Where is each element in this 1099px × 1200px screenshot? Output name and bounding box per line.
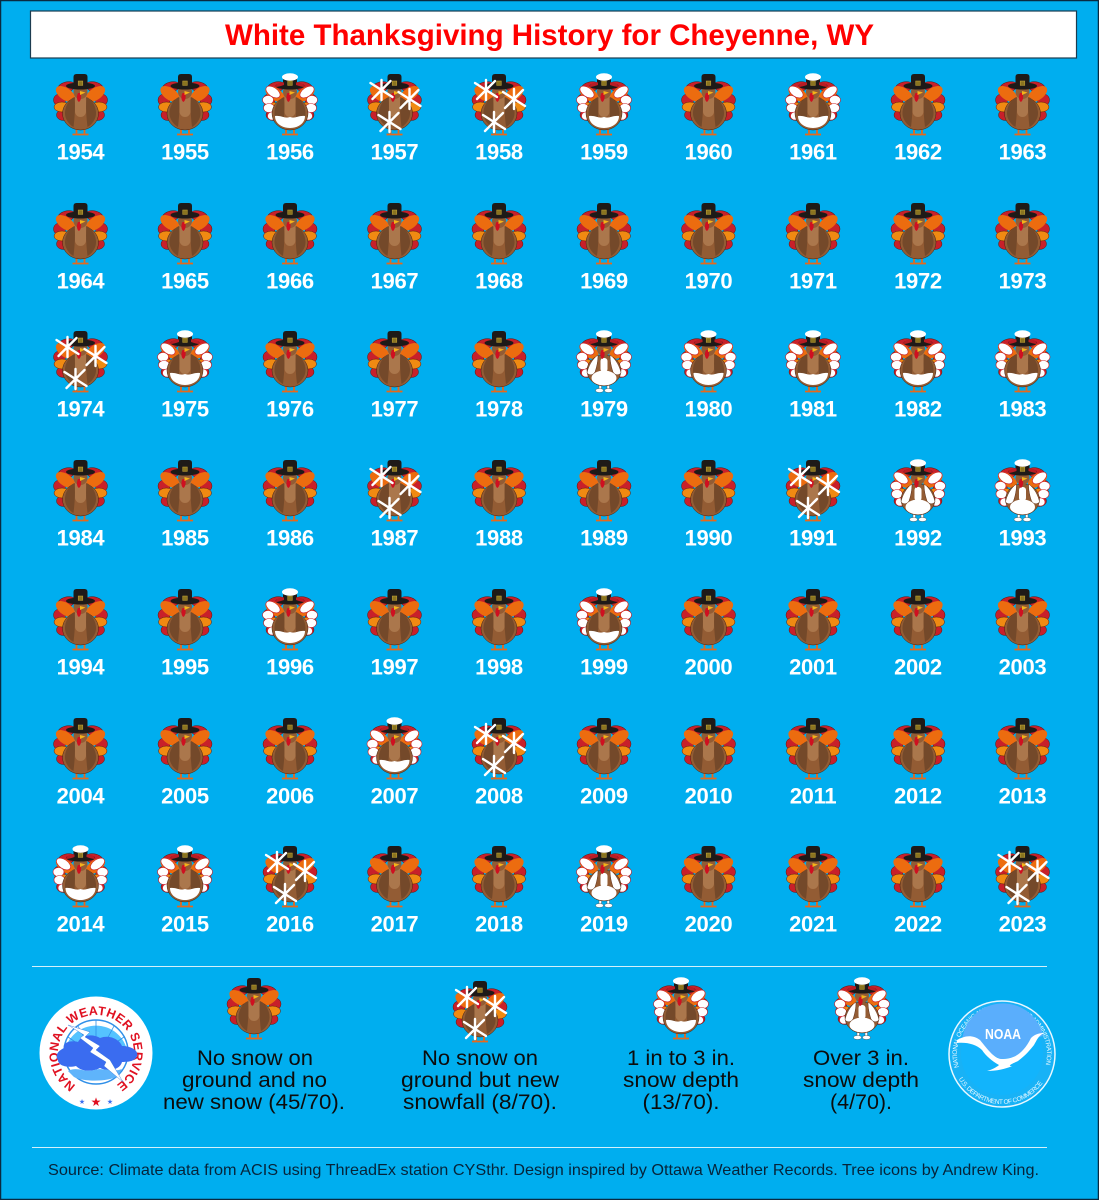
1984 no snow: 1984 [57,526,105,550]
1955 no snow [158,74,212,164]
2015 snow depth 1-3 in [158,845,212,936]
1957 new snowfall [367,74,422,164]
2018 no snow: 2018 [475,912,523,936]
1985 no snow [158,460,212,550]
1971 no snow: 1971 [789,268,837,294]
1958 new snowfall [472,74,526,164]
1999 snow depth 1-3 in: 1999 [580,654,628,680]
1962 no snow: 1962 [894,140,942,164]
logo: NOAA: U.S. DEPARTMENT OF COMMERCE [959,1076,1042,1104]
1983 snow depth 1-3 in [995,330,1050,422]
1975 snow depth 1-3 in: 1975 [161,396,209,422]
1963 no snow: 1963 [999,140,1046,164]
1960 no snow: 1960 [685,140,732,164]
logo: NOAA: NOAA [985,1026,1021,1043]
1958 new snowfall: 1958 [475,140,523,164]
2017 no snow: 2017 [371,912,418,936]
2011 no snow: 2011 [790,784,836,808]
1990 no snow: 1990 [685,526,732,550]
1967 no snow [367,203,422,294]
1973 no snow: 1973 [999,268,1046,294]
2002 no snow: 2002 [894,654,942,680]
2004 no snow [53,718,108,808]
1975 snow depth 1-3 in [158,330,212,422]
1986 no snow [263,460,317,550]
2020 no snow: 2020 [685,912,732,936]
1960 no snow [681,74,736,164]
1959 snow depth 1-3 in: 1959 [580,140,628,164]
2008 new snowfall [472,718,526,808]
1982 snow depth 1-3 in [890,330,946,422]
1993 snow depth over 3 in: 1993 [999,526,1046,550]
1988 no snow: 1988 [475,526,523,550]
2023 new snowfall [995,846,1050,936]
2013 no snow [995,718,1050,808]
2021 no snow: 2021 [789,912,837,936]
1995 no snow: 1995 [161,654,209,680]
1980 snow depth 1-3 in: 1980 [685,396,732,422]
1974 new snowfall: 1974 [57,396,105,422]
1987 new snowfall [367,460,422,550]
legend: no snow: ground and no [182,1069,327,1092]
2008 new snowfall: 2008 [475,784,523,808]
1997 no snow [367,589,422,680]
1995 no snow [158,589,212,680]
logo: National Weather Service: ★ [79,1098,85,1106]
legend: new snowfall: No snow on [422,1047,538,1070]
1984 no snow [53,460,108,550]
1972 no snow: 1972 [894,268,942,294]
source note: Source: Climate data from ACIS using ThreadEx station CYSthr. Design inspired by Ottawa Weather Records. Tree icons by Andrew King. [48,1162,1039,1179]
1978 no snow [472,331,526,422]
legend: over 3 in depth: (4/70). [830,1091,892,1114]
logo: National Weather Service: ★ [107,1098,113,1106]
1968 no snow [472,203,526,294]
1991 new snowfall: 1991 [789,526,837,550]
2005 no snow [158,718,212,808]
1992 snow depth over 3 in [890,459,946,550]
1979 snow depth over 3 in: 1979 [580,396,628,422]
2019 snow depth over 3 in [576,845,632,936]
2011 no snow [786,718,840,808]
1993 snow depth over 3 in [995,459,1050,550]
1964 no snow: 1964 [57,268,105,294]
2023 new snowfall: 2023 [999,912,1046,936]
legend: 1 to 3 in depth: snow depth [623,1069,739,1092]
1973 no snow [995,203,1050,294]
1969 no snow: 1969 [580,268,628,294]
1983 snow depth 1-3 in: 1983 [999,396,1046,422]
1954 no snow: 1954 [57,140,105,164]
2005 no snow: 2005 [161,784,209,808]
2018 no snow [472,846,526,936]
2020 no snow [681,846,736,936]
1981 snow depth 1-3 in: 1981 [789,396,837,422]
2022 no snow: 2022 [894,912,942,936]
1987 new snowfall: 1987 [371,526,418,550]
2007 snow depth 1-3 in [367,717,422,808]
1980 snow depth 1-3 in [681,330,736,422]
1979 snow depth over 3 in [576,330,632,422]
1988 no snow [472,460,526,550]
logo: NOAA [948,1000,1056,1108]
legend: over 3 in depth [803,977,919,1114]
1994 no snow: 1994 [57,654,105,680]
2022 no snow [891,846,945,936]
1990 no snow [681,460,736,550]
2016 new snowfall: 2016 [266,912,314,936]
1999 snow depth 1-3 in [576,588,632,680]
2001 no snow: 2001 [789,654,837,680]
1977 no snow: 1977 [371,396,418,422]
2016 new snowfall [263,846,317,936]
2007 snow depth 1-3 in: 2007 [371,784,418,808]
2000 no snow [681,589,736,680]
1956 snow depth 1-3 in [262,73,318,164]
legend: no snow: No snow on [197,1047,313,1070]
1966 no snow [263,203,317,294]
logo: National Weather Service [40,996,152,1110]
legend: no snow [163,978,345,1114]
2014 snow depth 1-3 in [53,845,108,936]
legend: 1 to 3 in depth: (13/70). [642,1091,720,1114]
legend: new snowfall: ground but new [401,1069,560,1092]
legend: 1 to 3 in depth [623,977,739,1114]
1967 no snow: 1967 [371,268,418,294]
legend: new snowfall [401,981,560,1114]
1956 snow depth 1-3 in: 1956 [266,140,314,164]
legend: 1 to 3 in depth: 1 in to 3 in. [627,1047,735,1070]
1974 new snowfall [53,331,108,422]
1996 snow depth 1-3 in: 1996 [266,654,314,680]
1954 no snow [53,74,108,164]
legend: over 3 in depth: snow depth [803,1069,919,1092]
2002 no snow [891,589,945,680]
1985 no snow: 1985 [161,526,209,550]
1972 no snow [891,203,945,294]
2012 no snow: 2012 [894,784,942,808]
2010 no snow [681,718,736,808]
2010 no snow: 2010 [685,784,732,808]
1961 snow depth 1-3 in: 1961 [789,140,837,164]
2004 no snow: 2004 [57,784,105,808]
2019 snow depth over 3 in: 2019 [580,912,628,936]
2009 no snow: 2009 [580,784,628,808]
2001 no snow [786,589,840,680]
1976 no snow [263,331,317,422]
1991 new snowfall [786,460,840,550]
legend: over 3 in depth: Over 3 in. [813,1047,909,1070]
logo: NOAA: NATIONAL OCEANIC AND ATMOSPHERIC ADMINISTRATION [952,1007,1052,1068]
turkey year grid [53,73,1050,936]
1957 new snowfall: 1957 [371,140,418,164]
2015 snow depth 1-3 in: 2015 [161,912,209,936]
1963 no snow [995,74,1050,164]
1969 no snow [577,203,631,294]
1971 no snow [786,203,840,294]
2003 no snow [995,589,1050,680]
2021 no snow [786,846,840,936]
1994 no snow [53,589,108,680]
2000 no snow: 2000 [685,654,732,680]
2006 no snow: 2006 [266,784,314,808]
1981 snow depth 1-3 in [786,330,840,422]
1966 no snow: 1966 [266,268,314,294]
1965 no snow [158,203,212,294]
1982 snow depth 1-3 in: 1982 [894,396,942,422]
1968 no snow: 1968 [475,268,523,294]
1976 no snow: 1976 [266,396,314,422]
2014 snow depth 1-3 in: 2014 [57,912,105,936]
1986 no snow: 1986 [266,526,314,550]
1998 no snow [472,589,526,680]
legend: new snowfall: snowfall (8/70). [403,1091,557,1114]
1998 no snow: 1998 [475,654,523,680]
title: White Thanksgiving History for Cheyenne, WY [225,19,874,52]
1992 snow depth over 3 in: 1992 [894,526,942,550]
logo: National Weather Service: ★ [91,1095,101,1109]
logo: National Weather Service: NATIONAL WEATHER SERVICE [49,1006,143,1092]
1970 no snow [681,203,736,294]
2006 no snow [263,718,317,808]
2017 no snow [367,846,422,936]
1959 snow depth 1-3 in [576,73,632,164]
2003 no snow: 2003 [999,654,1046,680]
1997 no snow: 1997 [371,654,418,680]
2012 no snow [891,718,945,808]
title [30,11,1076,58]
1996 snow depth 1-3 in [262,588,318,680]
1978 no snow: 1978 [475,396,523,422]
2009 no snow [577,718,631,808]
1989 no snow: 1989 [580,526,628,550]
1961 snow depth 1-3 in [786,73,840,164]
legend: no snow: new snow (45/70). [163,1091,345,1114]
1964 no snow [53,203,108,294]
1977 no snow [367,331,422,422]
1955 no snow: 1955 [161,140,209,164]
2013 no snow: 2013 [999,784,1046,808]
1962 no snow [891,74,945,164]
1970 no snow: 1970 [685,268,732,294]
1989 no snow [577,460,631,550]
1965 no snow: 1965 [161,268,209,294]
